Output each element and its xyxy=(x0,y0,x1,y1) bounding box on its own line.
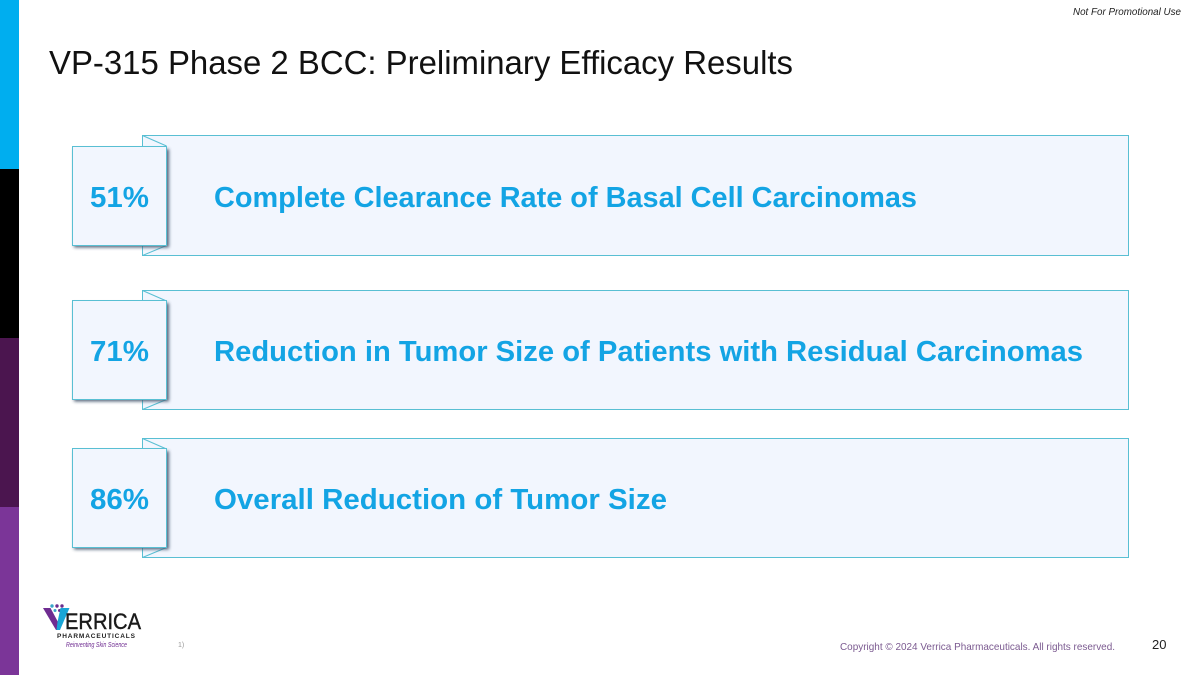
logo: Verrica Pharmaceuticals xyxy=(43,604,141,649)
copyright: Copyright © 2024 Verrica Pharmaceuticals. All rights reserved. xyxy=(840,641,1115,653)
panel: 51% complete clearance xyxy=(72,136,1128,256)
fold lines xyxy=(142,438,166,558)
number box shadow xyxy=(74,451,169,550)
panel: 86% overall reduction xyxy=(72,438,1128,558)
number box xyxy=(72,448,166,548)
value: 86% xyxy=(90,484,149,516)
label: Reduction in Tumor Size of Patients with Residual Carcinomas xyxy=(214,336,1083,368)
panel: 71% tumor size reduction xyxy=(72,290,1128,410)
title: VP-315 Phase 2 BCC: Preliminary Efficacy Results xyxy=(49,44,793,81)
number box xyxy=(72,146,166,246)
tagline: Reinventing Skin Science xyxy=(66,642,127,649)
wordmark: ERRICA xyxy=(65,609,141,634)
logo mark: dots xyxy=(50,604,64,612)
fold lines xyxy=(142,290,166,410)
ribbon background xyxy=(142,136,1128,256)
disclaimer: not for promotional use: Not For Promotional Use xyxy=(1073,6,1181,18)
label: Overall Reduction of Tumor Size xyxy=(214,484,667,516)
subtitle: PHARMACEUTICALS xyxy=(57,633,136,640)
value: 71% xyxy=(90,336,149,368)
fold lines xyxy=(142,136,166,256)
left color sidebar xyxy=(0,0,19,675)
page number: 20 xyxy=(1152,637,1166,652)
ribbon background xyxy=(142,438,1128,558)
number box shadow xyxy=(74,303,169,402)
label: Complete Clearance Rate of Basal Cell Carcinomas xyxy=(214,182,917,214)
value: 51% xyxy=(90,182,149,214)
number box shadow xyxy=(74,149,169,248)
footnote marker: 1) xyxy=(178,642,184,649)
ribbon background xyxy=(142,290,1128,410)
number box xyxy=(72,300,166,400)
logo mark: V xyxy=(43,608,60,630)
